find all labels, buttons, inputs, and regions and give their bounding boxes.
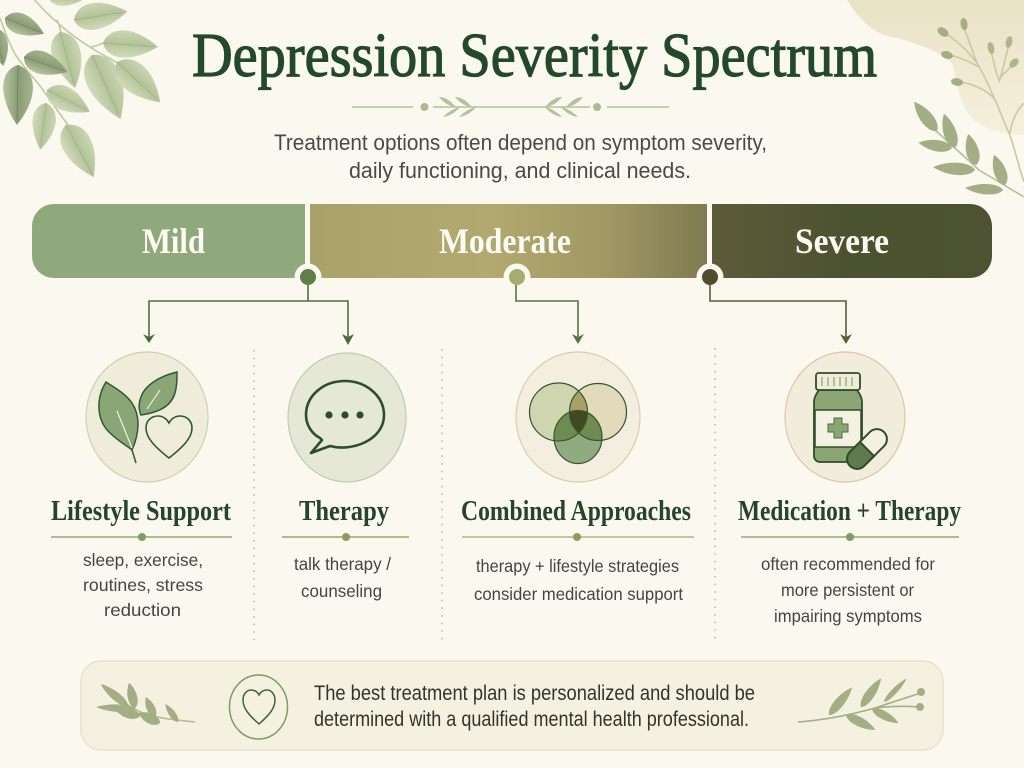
subtitle — [274, 130, 767, 183]
callout text: determined with a qualified mental health professional. — [314, 708, 749, 731]
description — [474, 556, 683, 604]
segment: severe: Severe — [795, 221, 889, 261]
description: talk therapy / — [294, 554, 391, 574]
segment: mild: Mild — [142, 221, 205, 261]
heading: Medication + Therapy — [738, 496, 961, 527]
heading: Combined Approaches — [461, 496, 691, 527]
description: consider medication support — [474, 584, 683, 604]
subtitle: Treatment options often depend on symptom severity, — [274, 130, 767, 155]
description: reduction — [104, 600, 181, 620]
description: routines, stress — [83, 575, 203, 595]
column: combined approaches — [461, 352, 694, 604]
heading rule — [741, 533, 959, 541]
title divider ornament — [352, 97, 669, 117]
segment: mild — [32, 204, 305, 278]
icon: venn diagram — [516, 352, 640, 482]
top-left foliage — [0, 0, 170, 184]
node: moderate — [504, 264, 530, 290]
description: sleep, exercise, — [83, 550, 203, 570]
icon: pill bottle and capsule — [785, 352, 905, 482]
segment: severe — [712, 204, 992, 278]
heading rule — [282, 533, 409, 541]
description — [83, 550, 203, 620]
right sprig — [798, 676, 925, 734]
segment: moderate: Moderate — [439, 221, 571, 261]
top-right sprigs — [909, 18, 1024, 197]
description: often recommended for — [761, 554, 935, 574]
severity spectrum bar — [32, 204, 992, 290]
title: Depression Severity Spectrum — [192, 22, 877, 90]
heading: Therapy — [299, 496, 389, 527]
description: counseling — [301, 581, 382, 601]
heading rule — [51, 533, 232, 541]
description — [761, 554, 935, 626]
arrow: severe to medication — [710, 285, 852, 344]
description: more persistent or — [781, 580, 914, 600]
column: medication + therapy — [738, 352, 961, 626]
node: mild — [294, 264, 322, 290]
heading: Lifestyle Support — [51, 496, 232, 527]
node: severe — [696, 264, 724, 290]
arrows: mild to lifestyle and therapy — [143, 285, 354, 345]
segment: moderate — [310, 204, 707, 278]
column: lifestyle support — [51, 352, 232, 620]
icon: heart in oval — [230, 675, 288, 739]
icon: leaves and heart — [86, 352, 208, 482]
heading rule — [462, 533, 694, 541]
description — [294, 554, 391, 601]
callout text: The best treatment plan is personalized and should be — [314, 682, 755, 705]
top-right watercolor blob — [847, 0, 1024, 135]
bottom callout panel — [81, 661, 943, 750]
description: impairing symptoms — [774, 606, 922, 626]
left sprig — [96, 681, 195, 728]
subtitle: daily functioning, and clinical needs. — [349, 158, 691, 183]
arrow: moderate to combined — [516, 285, 584, 344]
column: therapy — [282, 353, 409, 601]
icon: speech bubble — [288, 353, 406, 482]
description: therapy + lifestyle strategies — [476, 556, 679, 576]
callout text — [314, 682, 755, 731]
